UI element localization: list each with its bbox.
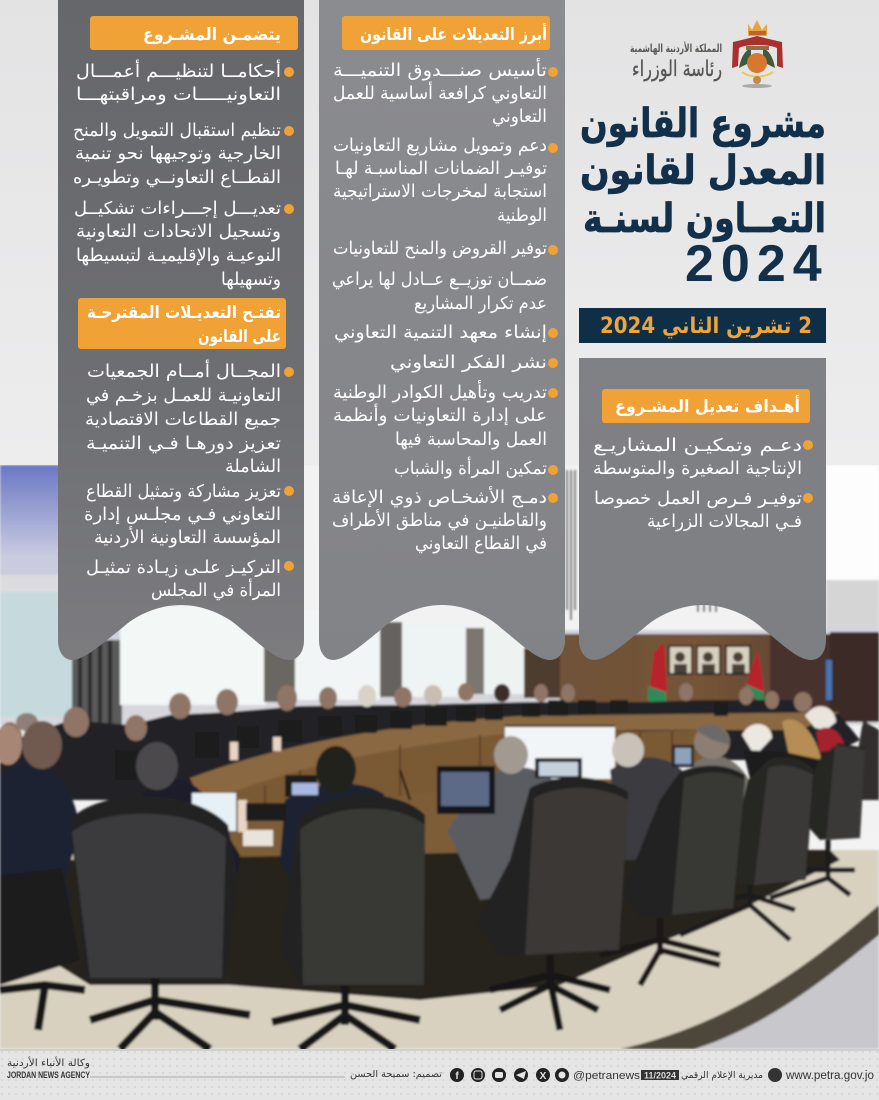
- curtains and windows: [0, 592, 74, 717]
- big white screen: [505, 725, 615, 779]
- chair 6: [770, 743, 865, 898]
- list: amendments: توفيـر الضمانات المناسبـة لهـا: [335, 159, 547, 179]
- list: what the amendments open: التعاونيـة للعمـل بزخـم في: [86, 386, 281, 406]
- heading: key amendments: أبرز التعديلات على القانون: [360, 23, 547, 45]
- seated back row heads: [0, 682, 814, 743]
- list: amendments: العمل والمحاسبة فيها: [395, 430, 547, 450]
- list: what the amendments open: المؤسسة التعاونية الأردنية: [94, 526, 281, 548]
- logo text: prime ministry: المملكة الأردنية الهاشمية: [630, 41, 722, 55]
- list: what the amendments open: المرأة في المجلس: [151, 578, 281, 601]
- man large front left: [0, 760, 80, 900]
- heading: amendment objectives: أهـداف تعديل المشـروع: [615, 395, 800, 417]
- list: objectives: فـي المجالات الزراعية: [647, 512, 802, 532]
- list: amendments: دعم وتمويل مشاريع التعاونيات: [333, 136, 547, 156]
- heading: proposed amendments open: [78, 298, 286, 349]
- icons: social media: f: [455, 1071, 459, 1082]
- list: what the amendments open: المجــال أمــام الجمعيات: [87, 359, 281, 382]
- title: 2024: [685, 235, 829, 293]
- list: amendments: تمكين المرأة والشباب: [394, 456, 547, 479]
- list: amendments: الوطنية: [497, 206, 547, 226]
- heading: proposed amendments open: على القانون: [198, 327, 281, 347]
- list: what the amendments open: تعزيز مشاركة وتمثيل القطاع: [86, 482, 281, 502]
- table top curve: [190, 712, 840, 800]
- list: amendments: على إدارة التعاونيات وأنظمة: [333, 403, 547, 426]
- chair 5: [680, 757, 814, 940]
- list: what the amendments open: التعاوني فـي مجلـس إدارة: [84, 505, 281, 525]
- panel: amendment objectives: [579, 358, 826, 660]
- seated row dark backs: [0, 700, 860, 800]
- man dark jacket near laptop: [610, 757, 686, 860]
- list: amendments: إنشاء معهد التنمية التعاوني: [334, 323, 547, 343]
- table front panels: [234, 730, 704, 806]
- list: what the amendments open: الشاملة: [225, 457, 281, 477]
- list: what the amendments open: جميع القطاعات الاقتصادية: [85, 410, 281, 430]
- heading: key amendments: [342, 16, 550, 50]
- list: project provisions: أحكامــا لتنظيـــم أعمـــال: [76, 59, 281, 82]
- list: project provisions: وتسجيل الاتحادات التعاونية: [76, 222, 281, 242]
- chair 3: [476, 777, 628, 1030]
- flags: [648, 642, 667, 712]
- ceiling and walls: [0, 465, 879, 725]
- left edge chair: [0, 868, 85, 1030]
- list: amendments: تدريب وتأهيل الكوادر الوطنية: [333, 380, 547, 403]
- list: what the amendments open: التركيـز علـى زيـادة تمثيـل: [86, 558, 281, 578]
- footer: digital media directorate: مديرية الإعلام الرقمي: [681, 1070, 763, 1081]
- footer: news agency: وكالة الأنباء الأردنية: [7, 1056, 90, 1069]
- title: المعدل لقانون: [580, 148, 826, 194]
- footer: [0, 1049, 879, 1100]
- list: amendments: [332, 58, 558, 554]
- list: project provisions: [73, 59, 294, 290]
- footer: handle: @petranews: [573, 1070, 641, 1082]
- list: project provisions: تعديـــل إجـــراءات تشكيــل: [74, 199, 281, 219]
- logo text: prime ministry: [630, 41, 722, 82]
- foreground table: [228, 796, 459, 859]
- woman hijab right: [805, 706, 836, 730]
- heading: proposed amendments open: تفتـح التعديـلات المقترحـة: [87, 303, 281, 323]
- list: amendments: توفير القروض والمنح للتعاونيات: [333, 239, 547, 259]
- chair 4: [600, 766, 745, 985]
- list: amendments: في القطاع التعاوني: [415, 534, 547, 554]
- list: objectives: دعـم وتمكيـن المشاريـع: [593, 436, 802, 456]
- man gray suit center: [447, 767, 553, 900]
- panel: project includes: [58, 0, 304, 660]
- chair 2: [272, 795, 425, 1049]
- list: amendments: التعاوني كرافعة أساسية للعمل: [333, 81, 547, 104]
- footer: designer credit: تصميم: سميحة الحسن: [350, 1069, 442, 1080]
- hanging chandelier strips: [567, 470, 716, 620]
- footer: news agency: [7, 1056, 345, 1080]
- man dark left: [163, 785, 241, 874]
- date bar: [579, 308, 826, 343]
- heading: project includes: يتضمـن المشـروع: [143, 25, 281, 45]
- list: project provisions: تنظيم استقبال التمويل والمنح: [73, 121, 281, 141]
- footer: date tag: 11/2024: [644, 1070, 676, 1080]
- list: what the amendments open: تعزيز دورهـا فـي التنميـة: [86, 434, 281, 454]
- chair 1: [70, 796, 250, 1049]
- list: what the amendments open: [84, 359, 294, 601]
- blonde woman: [782, 719, 822, 762]
- icon: petra globe: [768, 1068, 782, 1082]
- list: amendments: التعاوني: [492, 107, 547, 127]
- man gray jacket right: [691, 756, 750, 800]
- list: project provisions: وتسهيلها: [221, 270, 281, 290]
- list: amendments: عدم تكرار المشاريع: [414, 294, 547, 314]
- icons: social media: [450, 1068, 569, 1082]
- list: amendments: نشر الفكر التعاوني: [390, 353, 547, 373]
- portraits: [668, 645, 751, 675]
- title: مشروع القانون: [580, 101, 826, 147]
- photo: cabinet meeting room: [0, 465, 879, 1049]
- list: amendments: دمـج الأشخـاص ذوي الإعاقة: [332, 486, 547, 508]
- list: amendments: تأسيس صنـــدوق التنميـــة: [333, 58, 547, 81]
- man dark center left: [279, 782, 386, 878]
- logo: prime ministry emblem: [732, 20, 783, 88]
- title: [580, 101, 829, 293]
- list: objectives: الإنتاجية الصغيرة والمتوسطة: [593, 459, 802, 479]
- water bottles and boxes: [230, 737, 281, 832]
- laptops along back table: [115, 700, 728, 780]
- title: التعــاون لسنـة: [583, 196, 826, 242]
- date bar: 2 تشرين الثاني 2024: [600, 314, 812, 339]
- list: amendments: استجابة لمخرجات الاستراتيجية: [333, 182, 547, 202]
- list: project provisions: النوعيـة والإقليميـة لتبسيطها: [76, 246, 281, 266]
- list: project provisions: الخارجية وتوجيهها نحو تنمية: [75, 144, 281, 164]
- footer: website: www.petra.gov.jo: [785, 1070, 874, 1082]
- icons: social media: X: [540, 1071, 547, 1082]
- white hijab woman: [742, 724, 772, 756]
- list: objectives: توفيـر فـرص العمل خصوصا: [594, 489, 802, 509]
- logo text: prime ministry: رئاسة الوزراء: [632, 57, 722, 82]
- floor: [0, 850, 879, 1049]
- list: amendments: والقاطنيـن في مناطق الأطراف: [332, 509, 547, 531]
- list: objectives: [593, 436, 813, 532]
- list: project provisions: القطــاع التعاونــي وتطويـره: [73, 168, 281, 188]
- chair 7 far right: [857, 720, 879, 802]
- heading: project includes: [90, 16, 298, 50]
- list: amendments: ضمــان توزيــع عــادل لها يراعي: [332, 270, 547, 290]
- dark shadow under table and between chairs: [50, 850, 840, 1000]
- footer: news agency: JORDAN NEWS AGENCY: [7, 1070, 90, 1080]
- list: project provisions: التعاونيـــــات ومراقبتهـــا: [76, 85, 281, 105]
- panel: key amendments: [319, 0, 565, 660]
- heading: amendment objectives: [602, 389, 810, 423]
